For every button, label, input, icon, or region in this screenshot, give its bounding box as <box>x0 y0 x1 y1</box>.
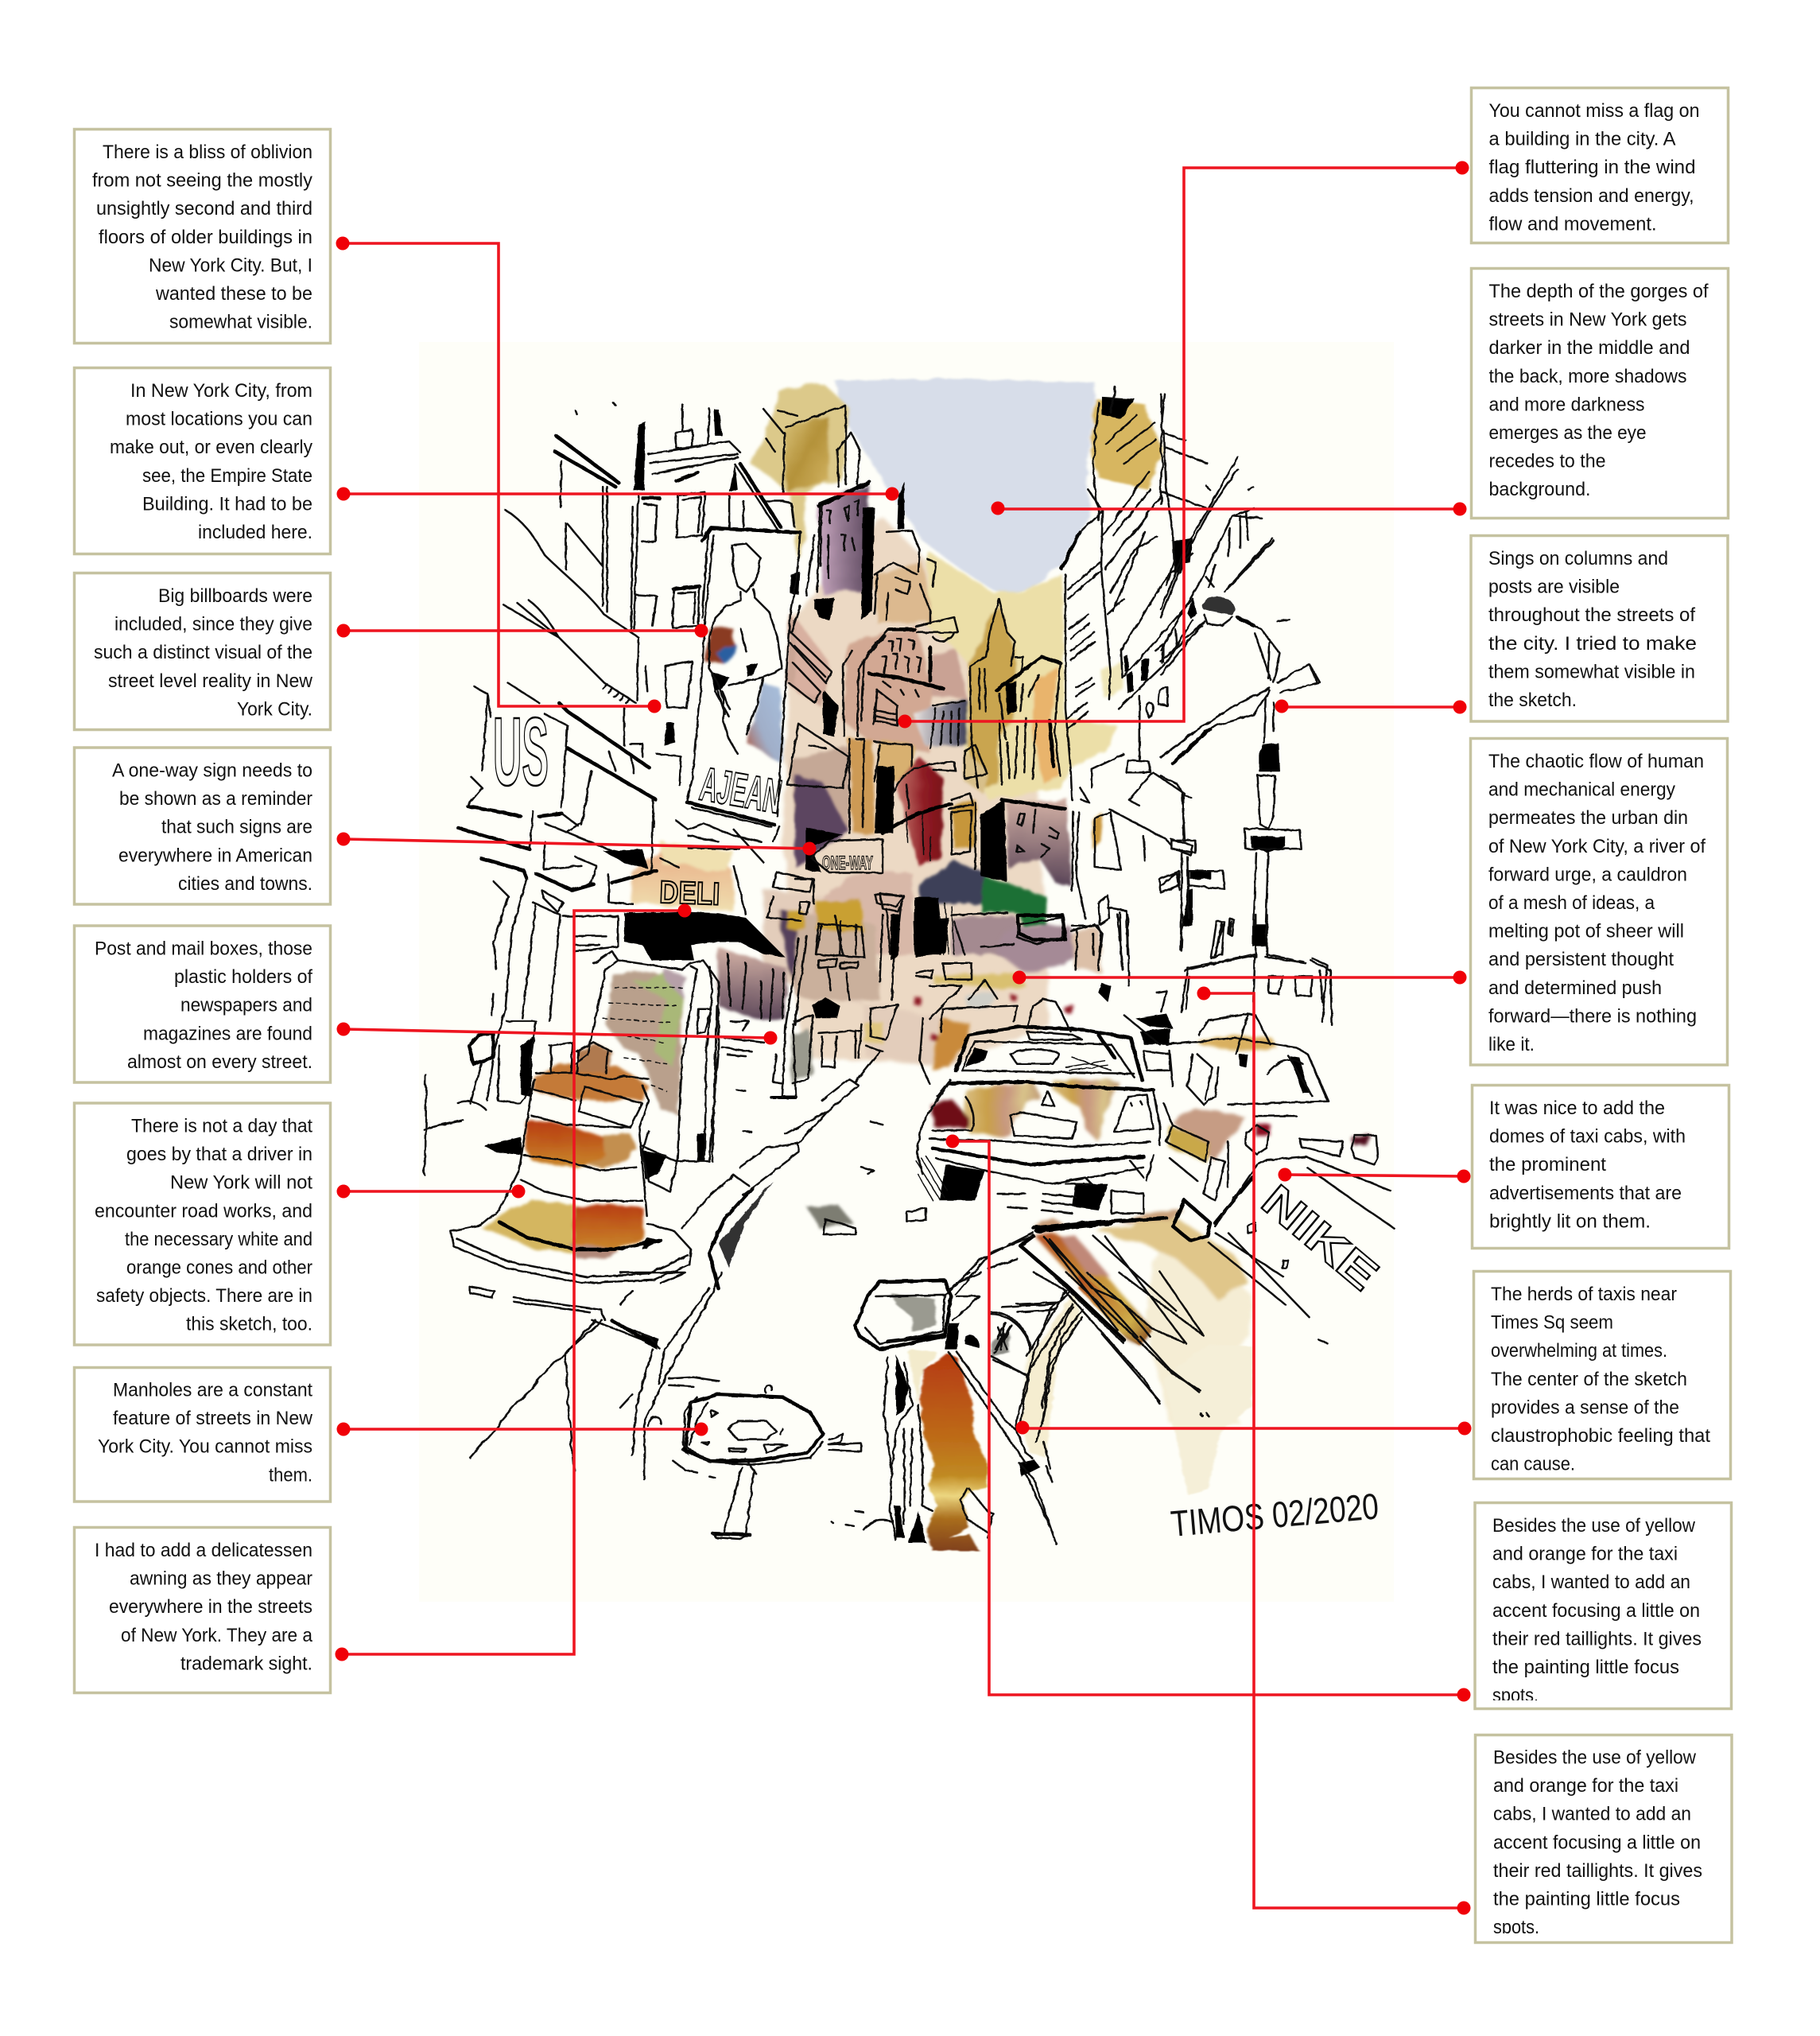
panel: right note, signs on posts: throughout the streets of <box>1488 604 1695 626</box>
panel: left note, billboards <box>75 573 331 730</box>
panel: left note, road works: There is not a day that <box>131 1115 312 1137</box>
panel: left note, Empire State Building: make out, or even clearly <box>110 437 312 458</box>
panel: right note, red taillights (second): cabs, I wanted to add an <box>1493 1804 1691 1825</box>
panel: right note, chaotic flow: and persistent thought <box>1488 949 1674 970</box>
panel: left note, one-way sign: A one-way sign needs to <box>112 760 312 781</box>
panel: right note, herds of taxis: can cause. <box>1491 1454 1575 1475</box>
panel: right note, flag: You cannot miss a flag on <box>1488 100 1700 122</box>
panel: left note, delicatessen awning: trademark sight. <box>180 1653 312 1674</box>
wash: taxis and open door <box>914 924 1368 1424</box>
connector: post boxes <box>337 1023 778 1045</box>
sketch lettering: ONE-WAY <box>822 853 873 874</box>
panel: left note, second and third floors: somewhat visible. <box>169 312 312 333</box>
panel: right note, red taillights (first): cabs, I wanted to add an <box>1492 1572 1690 1593</box>
panel: left note, billboards: Big billboards were <box>158 585 312 607</box>
panel: right note, red taillights (first): their red taillights. It gives <box>1492 1628 1702 1649</box>
panel: right note, depth of the gorges: darker in the middle and <box>1488 337 1690 359</box>
panel: left note, billboards: such a distinct visual of the <box>94 642 312 663</box>
panel: right note, red taillights (second): and orange for the taxi <box>1493 1775 1678 1797</box>
panel: right note, taxi domes: brightly lit on them. <box>1489 1210 1651 1232</box>
panel: left note, road works: this sketch, too. <box>186 1314 312 1335</box>
sketch lettering: DELI <box>659 875 720 912</box>
panel: left note, one-way sign <box>75 748 331 904</box>
panel: left note, post and mail boxes: Post and mail boxes, those <box>95 938 312 959</box>
panel: right note, signs on posts: the sketch. <box>1488 690 1577 711</box>
panel: right note, flag: flag fluttering in the wind <box>1488 157 1695 178</box>
panel: left note, manholes: Manholes are a constant <box>113 1379 312 1401</box>
panel: right note, signs on posts: the city. I tried to make <box>1488 633 1697 655</box>
painting: New York street sketch <box>419 342 1394 1602</box>
ink: mirror, figure, door pillar, manhole <box>620 1272 1209 1544</box>
panel: right note, flag: flow and movement. <box>1488 213 1657 235</box>
wash: central buildings <box>795 550 1123 954</box>
panel: right note, taxi domes: advertisements that are <box>1489 1183 1682 1204</box>
panel: left note, delicatessen awning <box>75 1527 331 1692</box>
panel: right note, red taillights (second) <box>1476 1735 1732 1942</box>
panel: left note, delicatessen awning: everywhere in the streets <box>109 1596 312 1618</box>
panel: left note, manholes <box>75 1368 331 1502</box>
panel: left note, one-way sign: be shown as a reminder <box>119 788 312 810</box>
panel: left note, one-way sign: everywhere in American <box>118 845 312 866</box>
panel: left note, delicatessen awning: I had to add a delicatessen <box>95 1540 312 1561</box>
panel: left note, Empire State Building: most locations you can <box>126 409 312 430</box>
panel: right note, red taillights (second): accent focusing a little on <box>1493 1832 1701 1853</box>
panel: left note, post and mail boxes <box>75 926 331 1082</box>
connector: taillights two <box>1197 986 1471 1915</box>
connector: upper floors <box>336 237 662 713</box>
panel: right note, depth of the gorges: The depth of the gorges of <box>1488 281 1709 302</box>
panel: left note, manholes: them. <box>269 1464 312 1486</box>
sketch lettering <box>493 697 1388 1544</box>
panel: right note, red taillights (second): the painting little focus <box>1493 1888 1680 1910</box>
panel: right note, depth of the gorges: recedes to the <box>1488 451 1606 472</box>
sketch lettering: NIKE <box>1252 1175 1388 1300</box>
panel: left note, billboards: street level reality in New <box>108 670 313 692</box>
panel: right note, herds of taxis: claustrophobic feeling that <box>1491 1425 1710 1447</box>
panel: right note, chaotic flow: of a mesh of ideas, a <box>1488 892 1655 914</box>
panel: right note, signs on posts: them somewhat visible in <box>1488 661 1695 682</box>
wash: sky and top right ochre <box>835 379 1162 596</box>
panel: left note, second and third floors: floors of older buildings in <box>99 227 312 248</box>
connector: chaotic flow <box>1013 970 1466 985</box>
panel: right note, flag: adds tension and energy, <box>1488 185 1694 207</box>
panel: right note, signs on posts <box>1471 536 1728 721</box>
panel: right note, depth of the gorges <box>1471 269 1729 519</box>
panel: right note, red taillights (second): their red taillights. It gives <box>1493 1860 1702 1882</box>
panel: right note, chaotic flow: forward urge, a cauldron <box>1488 864 1687 885</box>
panel: right note, depth of the gorges: emerges as the eye <box>1488 422 1646 444</box>
panel: left note, Empire State Building: Building. It had to be <box>142 493 312 515</box>
ink: deli awning, newsstand, road cone, curb <box>429 811 904 1288</box>
sketch lettering: AJEAN <box>697 757 786 824</box>
panel: right note, red taillights (first): the painting little focus <box>1492 1657 1679 1678</box>
connector: taillights one <box>946 1134 1471 1702</box>
panel: right note, red taillights (first): Besides the use of yellow <box>1492 1515 1696 1537</box>
connector: one-way sign <box>337 832 816 856</box>
panel: left note, second and third floors: wanted these to be <box>155 283 312 305</box>
panel: left note, post and mail boxes: plastic holders of <box>174 966 312 988</box>
panel: right note, chaotic flow: like it. <box>1488 1034 1535 1055</box>
panel: left note, Empire State Building: In New York City, from <box>130 380 312 402</box>
ink: central buildings, flag, lamp <box>795 482 1193 954</box>
panel: right note, chaotic flow: forward—there is nothing <box>1488 1005 1697 1027</box>
panel: left note, one-way sign: that such signs are <box>161 817 312 838</box>
panel: left note, second and third floors: unsightly second and third <box>96 198 312 220</box>
wash: upper left buildings and billboard <box>705 383 868 827</box>
panel: left note, Empire State Building: see, the Empire State <box>142 465 312 487</box>
panel: right note, signs on posts: posts are visible <box>1488 577 1620 598</box>
sketch lettering: US <box>493 697 549 806</box>
panel: right note, chaotic flow <box>1471 738 1727 1065</box>
panel: right note, red taillights (first): accent focusing a little on <box>1492 1600 1700 1622</box>
connector: road cone <box>337 1185 525 1198</box>
panel: left note, road works: encounter road works, and <box>95 1200 312 1222</box>
panel: right note, taxi domes <box>1473 1085 1729 1249</box>
wash: base tone behind central buildings <box>763 517 1050 1066</box>
panel: right note, chaotic flow: and mechanical energy <box>1488 779 1675 801</box>
panel: right note, taxi domes: the prominent <box>1489 1154 1606 1175</box>
panel: left note, delicatessen awning: awning as they appear <box>130 1568 312 1590</box>
panel: left note, manholes: York City. You cannot miss <box>98 1436 312 1458</box>
connector: billboard <box>337 624 708 638</box>
panel: left note, road works: orange cones and other <box>126 1257 312 1279</box>
panel: right note, depth of the gorges: streets in New York gets <box>1488 309 1687 331</box>
panel: right note, taxi domes: It was nice to add the <box>1489 1098 1665 1119</box>
panel: right note, herds of taxis: overwhelming at times. <box>1491 1340 1667 1362</box>
panel: right note, signs on posts: Sings on columns and <box>1488 548 1668 569</box>
panel: left note, post and mail boxes: newspapers and <box>180 995 312 1016</box>
ink: upper left buildings and billboard <box>468 405 868 827</box>
panel: right note, red taillights (first) <box>1475 1503 1732 1708</box>
panel: right note, red taillights (first): and orange for the taxi <box>1492 1544 1678 1565</box>
panel: left note, second and third floors: New York City. But, I <box>149 254 312 276</box>
panel: right note, red taillights (first): spots. <box>1492 1685 1539 1707</box>
wash: figure and door pillar <box>892 1272 1253 1551</box>
panel: left note, road works: New York will not <box>170 1172 312 1194</box>
connector: flag <box>898 161 1469 729</box>
ink: top right and far left fragments <box>576 387 1162 569</box>
panel: left note, road works <box>75 1103 331 1345</box>
panel: left note, post and mail boxes: magazines are found <box>143 1023 312 1044</box>
connector: depth of the street <box>991 501 1466 515</box>
panel: right note, red taillights (second): Besides the use of yellow <box>1493 1747 1697 1769</box>
panel: right note, taxi domes: domes of taxi cabs, with <box>1489 1126 1686 1148</box>
ink: taxis, NIKE sign, door <box>891 915 1394 1424</box>
panel: right note, chaotic flow: The chaotic flow of human <box>1488 751 1704 772</box>
connector lines and dots <box>336 161 1471 1915</box>
ink: sidewalk lines at lower left <box>423 1075 655 1471</box>
panel: right note, herds of taxis: The center of the sketch <box>1491 1369 1687 1390</box>
connector: signs on posts <box>1275 700 1466 714</box>
panel: right note, herds of taxis: The herds of taxis near <box>1491 1284 1677 1305</box>
panel: left note, Empire State Building: included here. <box>198 522 312 543</box>
panel: right note, flag <box>1471 87 1729 243</box>
ink: right street lamp, poles and signs <box>1161 394 1332 1002</box>
panel: right note, chaotic flow: melting pot of sheer will <box>1488 921 1684 942</box>
panel: left note, delicatessen awning: of New York. They are a <box>121 1625 313 1646</box>
panel: right note, depth of the gorges: and more darkness <box>1488 394 1644 415</box>
connector: taxi domes <box>1279 1168 1471 1183</box>
panel: left note, billboards: included, since they give <box>114 614 312 635</box>
panel: left note, second and third floors: from not seeing the mostly <box>92 170 312 192</box>
connector: deli awning <box>336 903 692 1661</box>
panel: left note, manholes: feature of streets in New <box>113 1408 313 1429</box>
panel: left note, Empire State Building <box>75 367 331 554</box>
panel: left note, road works: safety objects. There are in <box>96 1285 312 1307</box>
sketch lettering: TIMOS 02/2020 <box>1169 1485 1380 1544</box>
panel: left note, road works: the necessary white and <box>125 1229 312 1250</box>
panel: left note, second and third floors: There is a bliss of oblivion <box>103 142 312 163</box>
connector: herds of taxis <box>1016 1420 1471 1435</box>
panel: right note, chaotic flow: and determined push <box>1488 977 1662 999</box>
panel: right note, chaotic flow: permeates the urban din <box>1488 807 1688 829</box>
panel: left note, billboards: York City. <box>237 698 312 720</box>
panel: right note, herds of taxis: provides a sense of the <box>1491 1397 1679 1418</box>
panel: left note, one-way sign: cities and towns. <box>178 873 312 895</box>
connector: manhole <box>337 1422 708 1436</box>
panel: right note, red taillights (second): spots. <box>1493 1917 1539 1938</box>
panel: right note, chaotic flow: of New York City, a river of <box>1488 836 1706 857</box>
panel: right note, herds of taxis <box>1474 1271 1730 1479</box>
panel: left note, post and mail boxes: almost on every street. <box>127 1051 312 1073</box>
panel: left note, second and third floors <box>75 129 331 344</box>
panel: right note, herds of taxis: Times Sq seem <box>1491 1312 1613 1334</box>
connector: Empire State Building <box>337 487 898 501</box>
panel: right note, depth of the gorges: the back, more shadows <box>1488 366 1687 387</box>
panel: right note, depth of the gorges: background. <box>1488 479 1590 500</box>
wash: deli, newsstand, cone <box>481 841 883 1259</box>
panel: right note, flag: a building in the city. A <box>1488 129 1676 150</box>
panel: left note, road works: goes by that a driver in <box>126 1144 312 1165</box>
